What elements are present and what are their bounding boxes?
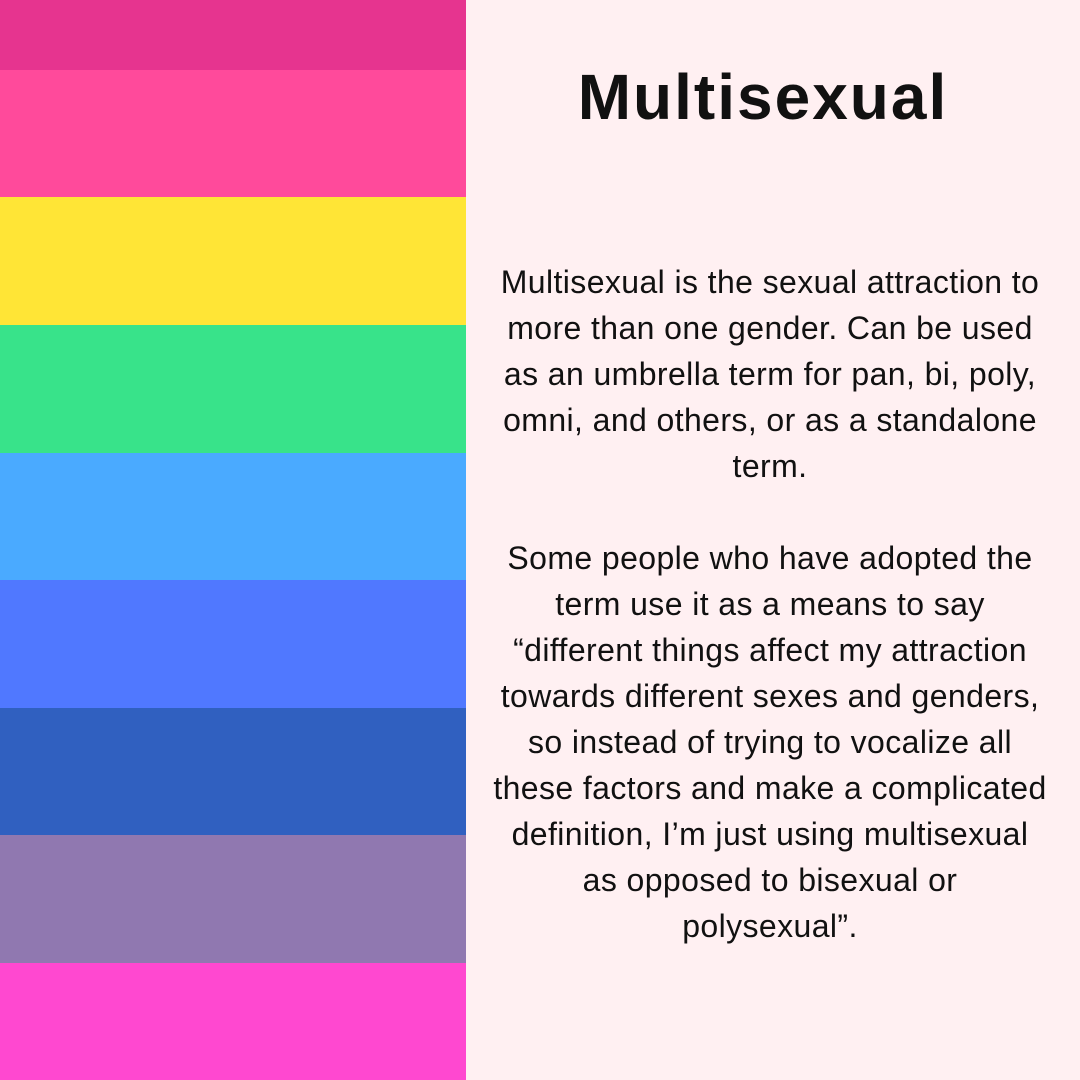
definition text: more than one gender. Can be used xyxy=(507,310,1033,346)
definition text: so instead of trying to vocalize all xyxy=(528,724,1012,760)
definition text: as opposed to bisexual or xyxy=(583,862,957,898)
title: Multisexual xyxy=(578,61,948,133)
flag stripes xyxy=(0,0,466,1080)
definition text: definition, I’m just using multisexual xyxy=(512,816,1028,852)
definition text: “different things affect my attraction xyxy=(513,632,1027,668)
definition text xyxy=(493,264,1047,944)
definition text: term. xyxy=(733,448,807,484)
definition text: as an umbrella term for pan, bi, poly, xyxy=(504,356,1036,392)
definition text: Some people who have adopted the xyxy=(507,540,1033,576)
definition text: Multisexual is the sexual attraction to xyxy=(501,264,1039,300)
definition text: omni, and others, or as a standalone xyxy=(503,402,1037,438)
definition text: polysexual”. xyxy=(682,908,858,944)
definition text: towards different sexes and genders, xyxy=(501,678,1039,714)
definition text: these factors and make a complicated xyxy=(493,770,1047,806)
definition text: term use it as a means to say xyxy=(555,586,985,622)
